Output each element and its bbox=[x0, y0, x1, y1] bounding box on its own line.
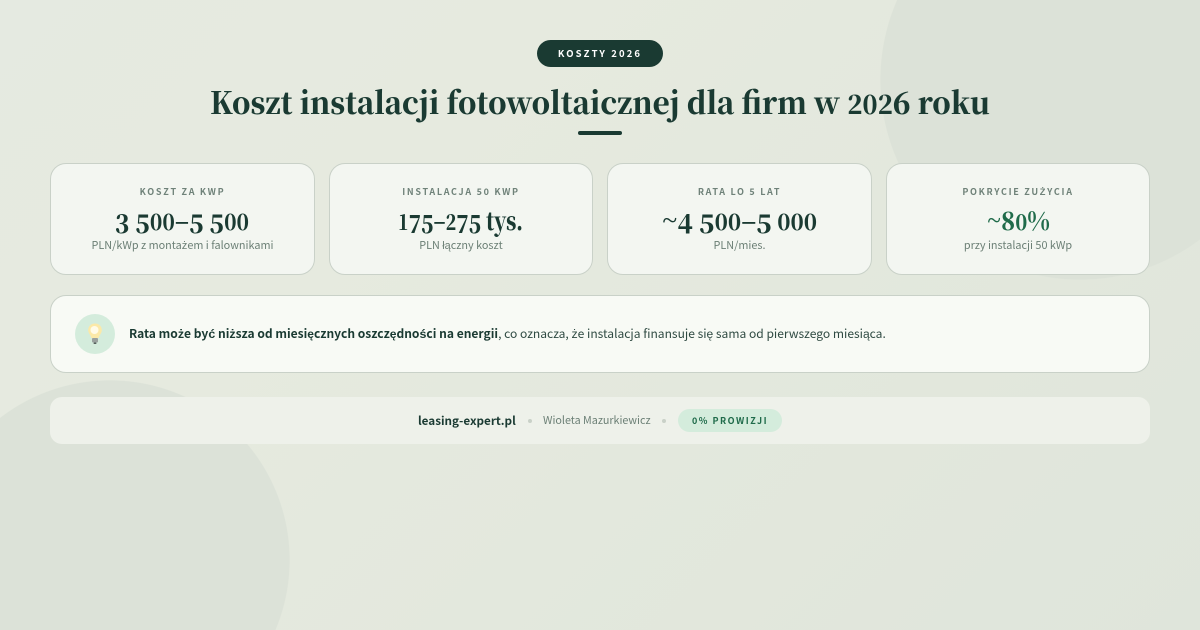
callout panel bbox=[50, 295, 1150, 373]
card: koszt za kWp bbox=[50, 163, 315, 275]
badge: Koszty 2026 bbox=[537, 40, 663, 67]
card: rata LO 5 lat bbox=[607, 163, 872, 275]
title: Koszt instalacji fotowoltaicznej dla firm w 2026 roku bbox=[210, 79, 990, 123]
card: rata LO 5 lat: 000 bbox=[772, 206, 817, 237]
callout text: Rata może być niższa od miesięcznych oszczędności na energii, co oznacza, że instalacja finansuje się sama od pierwszego miesiąca. bbox=[129, 325, 886, 342]
title underline bbox=[578, 131, 622, 135]
footer bar bbox=[50, 397, 1150, 444]
card: instalacja 50 kWp: 75 bbox=[409, 205, 433, 240]
card: instalacja 50 kWp: INSTALACJA 50 KWP bbox=[402, 185, 520, 198]
footer badge: 0% PROWIZJI bbox=[692, 414, 768, 427]
card: pokrycie zużycia: POKRYCIE ZUŻYCIA bbox=[962, 185, 1074, 198]
card: pokrycie zużycia: przy instalacji 50 kWp bbox=[964, 237, 1072, 253]
separator dot bbox=[528, 419, 532, 423]
card: koszt za kWp: KOSZT ZA KWP bbox=[140, 185, 225, 198]
card: instalacja 50 kWp: 1 bbox=[398, 206, 409, 237]
card: instalacja 50 kWp bbox=[329, 163, 593, 275]
background circle: top right bbox=[880, 0, 1200, 280]
separator dot bbox=[662, 419, 666, 423]
card: instalacja 50 kWp: 75 bbox=[456, 205, 481, 240]
card: koszt za kWp: 00 bbox=[224, 206, 249, 237]
card: instalacja 50 kWp: PLN łączny koszt bbox=[419, 237, 503, 253]
card: koszt za kWp: 5 5 bbox=[189, 205, 224, 240]
footer brand: leasing-expert.pl bbox=[418, 412, 516, 429]
card: rata LO 5 lat: RATA LO 5 LAT bbox=[698, 185, 781, 198]
card: pokrycie zużycia bbox=[886, 163, 1150, 275]
card: instalacja 50 kWp: 2 bbox=[446, 206, 456, 237]
badge: Koszty 2026: KOSZTY 2026 bbox=[558, 46, 642, 60]
footer badge bbox=[678, 409, 782, 432]
card: koszt za kWp: PLN/kWp z montażem i falownikami bbox=[91, 237, 274, 253]
card: rata LO 5 lat: 4 5 bbox=[678, 205, 715, 240]
footer author: Wioleta Mazurkiewicz bbox=[543, 413, 651, 428]
card: rata LO 5 lat: PLN/mies. bbox=[714, 237, 765, 253]
card: rata LO 5 lat: 5 bbox=[756, 205, 772, 240]
card: rata LO 5 lat: 00 bbox=[715, 206, 741, 237]
background circle: bottom left bbox=[0, 380, 290, 630]
card: koszt za kWp: 00 bbox=[150, 206, 175, 237]
card: koszt za kWp: 3 5 bbox=[115, 205, 150, 240]
icon: light bulb bbox=[75, 314, 115, 354]
